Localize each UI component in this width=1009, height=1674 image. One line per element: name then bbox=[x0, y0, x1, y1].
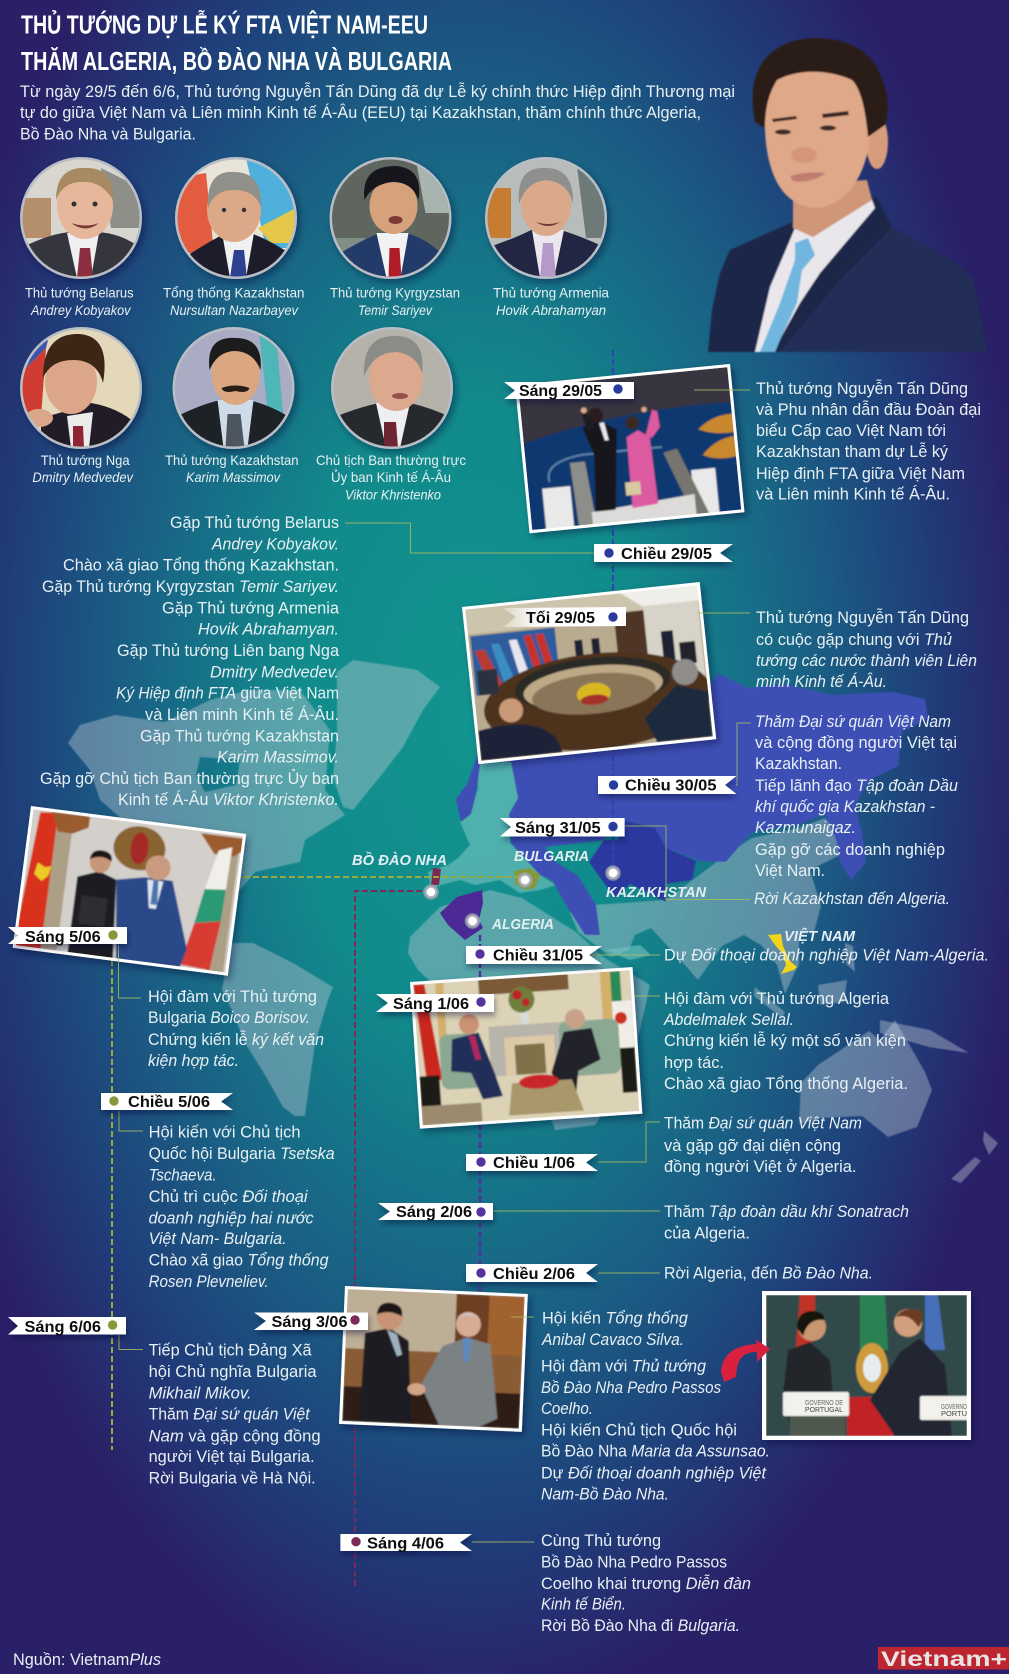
text: Chiều 29/05: Chào xã giao Tổng thống Kazakhstan. bbox=[63, 556, 339, 575]
connector lines bbox=[118, 390, 751, 1542]
leader captions: Dmitry Medvedev bbox=[32, 469, 134, 485]
event: Sáng 31/05 bbox=[500, 818, 950, 908]
ribbon: Sáng 5/06: Sáng 5/06 bbox=[25, 929, 101, 946]
ribbon: Chiều 1/06 bbox=[466, 1154, 598, 1172]
timeline lines bbox=[112, 350, 613, 1589]
text: Sáng 6/06: Rời Bulgaria về Hà Nội. bbox=[149, 1469, 316, 1488]
text: Sáng 3/06: Hội đàm với Thủ tướng bbox=[541, 1356, 707, 1376]
ribbon: Sáng 2/06 bbox=[378, 1203, 493, 1221]
country: vietnam bbox=[768, 934, 797, 974]
text: Chiều 5/06: doanh nghiệp hai nước bbox=[149, 1209, 314, 1228]
text: Chiều 1/06: Thăm Đại sứ quán Việt Nam bbox=[664, 1114, 862, 1132]
text: Sáng 5/06: Bulgaria Boico Borisov. bbox=[148, 1008, 310, 1027]
intro paragraph bbox=[20, 82, 735, 143]
text: Chiều 29/05: Gặp Thủ tướng Kazakhstan bbox=[140, 726, 339, 745]
source: Nguồn: VietnamPlus bbox=[13, 1650, 161, 1669]
text: Chiều 2/06: Rời Algeria, đến Bồ Đào Nha. bbox=[664, 1264, 873, 1283]
map labels: BULGARIA bbox=[514, 848, 589, 865]
text: Sáng 31/05: Rời Kazakhstan đến Algeria. bbox=[754, 889, 950, 908]
text: Sáng 5/06: Chứng kiến lễ ký kết văn bbox=[148, 1030, 324, 1049]
ribbon: Chiều 30/05: Chiều 30/05 bbox=[625, 778, 717, 795]
ribbon: Sáng 5/06 bbox=[8, 927, 127, 946]
ribbon: Chiều 5/06 bbox=[101, 1093, 233, 1111]
ribbon: Chiều 31/05 bbox=[466, 946, 602, 964]
text: Chiều 5/06: Việt Nam- Bulgaria. bbox=[149, 1229, 287, 1248]
leader captions: Thủ tướng Nga bbox=[41, 452, 130, 468]
text: Chiều 30/05: Tiếp lãnh đạo Tập đoàn Dầu bbox=[755, 776, 959, 795]
ribbon: Sáng 3/06 bbox=[254, 1312, 368, 1331]
text: Sáng 3/06: Nam-Bồ Đào Nha. bbox=[541, 1485, 669, 1504]
text: Sáng 3/06 bbox=[541, 1309, 770, 1504]
ribbon: Chiều 5/06: Chiều 5/06 bbox=[128, 1094, 210, 1111]
portrait: Nguyen Tan Dung bbox=[708, 38, 987, 352]
text: Chiều 30/05: khí quốc gia Kazakhstan - bbox=[755, 797, 935, 816]
text: Chiều 5/06: Quốc hội Bulgaria Tsetska bbox=[149, 1144, 335, 1163]
arrow: red curved bbox=[721, 1339, 770, 1382]
text: Sáng 2/06 bbox=[664, 1202, 909, 1243]
ribbon: Sáng 4/06: Sáng 4/06 bbox=[367, 1536, 444, 1553]
text: Sáng 3/06: Anibal Cavaco Silva. bbox=[541, 1330, 684, 1349]
map labels bbox=[352, 848, 855, 945]
portrait: Dmitry Medvedev bbox=[20, 327, 142, 449]
text: Sáng 29/05: và Liên minh Kinh tế Á-Âu. bbox=[756, 484, 950, 504]
country: portugal bbox=[431, 868, 441, 885]
text: Chiều 29/05: Andrey Kobyakov. bbox=[211, 534, 339, 553]
ribbon: Sáng 29/05: Sáng 29/05 bbox=[519, 383, 602, 400]
text: Chiều 29/05: Karim Massimov. bbox=[217, 748, 339, 767]
text: Chiều 5/06: Tschaeva. bbox=[149, 1166, 217, 1185]
text: Chiều 30/05: Gặp gỡ các doanh nghiệp bbox=[755, 840, 945, 859]
country: bulgaria bbox=[514, 868, 540, 890]
event: Tối 29/05 bbox=[503, 607, 977, 691]
portrait: Temir Sariyev bbox=[330, 157, 452, 279]
photo: departure 29/05 bbox=[515, 364, 745, 534]
text: Chiều 30/05 bbox=[755, 712, 959, 880]
leader captions: Nursultan Nazarbayev bbox=[170, 302, 299, 318]
ribbon: Chiều 31/05: Chiều 31/05 bbox=[493, 948, 583, 964]
country: algeria bbox=[440, 890, 483, 940]
text: Sáng 29/05: và Phu nhân dẫn đầu Đoàn đại bbox=[756, 400, 981, 419]
leader captions: Thủ tướng Kazakhstan bbox=[165, 452, 298, 468]
ribbon: Chiều 1/06: Chiều 1/06 bbox=[493, 1155, 575, 1172]
text: Sáng 1/06: Chào xã giao Tổng thống Algeria. bbox=[664, 1074, 908, 1093]
ribbon: Sáng 1/06 bbox=[376, 994, 494, 1013]
text: Sáng 4/06 bbox=[541, 1531, 751, 1635]
leader captions: Chủ tịch Ban thường trực bbox=[316, 452, 466, 468]
text: Sáng 1/06: Chứng kiến lễ ký một số văn kiện bbox=[664, 1031, 906, 1050]
text: Sáng 1/06: Hội đàm với Thủ tướng Algeria bbox=[664, 989, 890, 1008]
ribbon: Sáng 1/06: Sáng 1/06 bbox=[393, 996, 469, 1013]
leaders: portraits row 1 bbox=[20, 157, 607, 279]
event: Chiều 31/05 bbox=[466, 946, 989, 965]
leader captions: Ủy ban Kinh tế Á-Âu bbox=[331, 468, 451, 485]
text: Sáng 4/06: Cùng Thủ tướng bbox=[541, 1531, 661, 1550]
text: Chiều 29/05: Kinh tế Á-Âu Viktor Khristenko. bbox=[118, 790, 339, 809]
text: Sáng 6/06: Thăm Đại sứ quán Việt bbox=[149, 1405, 311, 1424]
map pins bbox=[425, 867, 619, 927]
leader captions bbox=[25, 284, 609, 502]
text: Sáng 6/06: người Việt tại Bulgaria. bbox=[149, 1447, 315, 1466]
text: Sáng 3/06: Hội kiến Chủ tịch Quốc hội bbox=[541, 1420, 737, 1440]
map labels: KAZAKHSTAN bbox=[606, 884, 707, 901]
text: Chiều 30/05: Thăm Đại sứ quán Việt Nam bbox=[755, 712, 951, 731]
text: Chiều 1/06: và gặp gỡ đại diện cộng bbox=[664, 1136, 841, 1155]
text: Chiều 30/05: Kazmunaigaz. bbox=[755, 818, 856, 837]
text: Chiều 29/05: Hovik Abrahamyan. bbox=[198, 620, 339, 639]
logo: Vietnam+: Vietnam+ bbox=[881, 1648, 1007, 1671]
text: Sáng 4/06: Bồ Đào Nha Pedro Passos bbox=[541, 1552, 727, 1572]
text: Tối 29/05: minh Kinh tế Á-Âu. bbox=[756, 672, 887, 691]
ribbon: Sáng 31/05 bbox=[500, 818, 625, 837]
leader captions: Andrey Kobyakov bbox=[30, 302, 131, 318]
text: Sáng 29/05: Thủ tướng Nguyễn Tấn Dũng bbox=[756, 379, 968, 398]
event: Sáng 3/06 bbox=[254, 1309, 770, 1504]
text: Sáng 6/06: hội Chủ nghĩa Bulgaria bbox=[149, 1362, 317, 1381]
text: Sáng 4/06: Coelho khai trương Diễn đàn bbox=[541, 1574, 751, 1593]
text: Chiều 29/05: Ký Hiệp định FTA giữa Việt Nam bbox=[116, 684, 339, 703]
text: Tối 29/05: Thủ tướng Nguyễn Tấn Dũng bbox=[756, 608, 969, 627]
leader captions: Karim Massimov bbox=[186, 469, 281, 485]
text: Chiều 1/06 bbox=[664, 1114, 862, 1176]
ribbon: Chiều 30/05 bbox=[598, 776, 736, 795]
event: Chiều 2/06 bbox=[466, 1264, 873, 1283]
russia bbox=[478, 673, 928, 935]
text: Chiều 29/05: Gặp Thủ tướng Liên bang Nga bbox=[117, 641, 340, 660]
text: Sáng 4/06: Rời Bồ Đào Nha đi Bulgaria. bbox=[541, 1616, 740, 1635]
title: THĂM ALGERIA, BỒ ĐÀO NHA VÀ BULGARIA bbox=[21, 46, 452, 76]
logo: Vietnam+ bbox=[878, 1647, 1009, 1671]
text: Chiều 29/05: Gặp Thủ tướng Belarus bbox=[170, 513, 339, 532]
event: Sáng 29/05 bbox=[504, 379, 981, 504]
text: Sáng 4/06: Kinh tế Biển. bbox=[541, 1595, 626, 1614]
text: Sáng 29/05: Kazakhstan tham dự Lễ ký bbox=[756, 442, 948, 461]
photo: round table 29/05 bbox=[462, 582, 716, 764]
ribbon: Sáng 29/05 bbox=[504, 382, 634, 400]
portrait: Viktor Khristenko bbox=[331, 327, 453, 449]
text: Sáng 29/05: biểu Cấp cao Việt Nam tới bbox=[756, 421, 946, 440]
text: Sáng 6/06: Tiếp Chủ tịch Đảng Xã bbox=[149, 1340, 312, 1360]
map labels: ALGERIA bbox=[491, 916, 554, 933]
text: Sáng 3/06: Dự Đối thoại doanh nghiệp Việt bbox=[541, 1464, 767, 1482]
portrait: Nursultan Nazarbayev bbox=[175, 157, 297, 279]
leader captions: Thủ tướng Armenia bbox=[493, 284, 609, 300]
event: Sáng 4/06 bbox=[340, 1531, 751, 1635]
text: Chiều 29/05 bbox=[40, 513, 340, 809]
event: Sáng 6/06 bbox=[8, 1317, 321, 1488]
event: Chiều 5/06 bbox=[101, 1093, 335, 1291]
photo: Algeria meeting bbox=[410, 967, 642, 1129]
text: Chiều 29/05: Dmitry Medvedev. bbox=[210, 662, 339, 681]
text: Chiều 5/06: Rosen Plevneliev. bbox=[149, 1272, 269, 1291]
text: Chiều 31/05: Dự Đối thoại doanh nghiệp Việt Nam-Algeria. bbox=[664, 946, 989, 965]
text: Chiều 5/06: Chào xã giao Tổng thống bbox=[149, 1251, 329, 1270]
leader captions: Temir Sariyev bbox=[358, 302, 433, 318]
text: Sáng 3/06: Bồ Đào Nha Pedro Passos bbox=[541, 1378, 721, 1397]
photo: Portugal press conference bbox=[762, 1291, 971, 1440]
leader captions: Thủ tướng Belarus bbox=[25, 284, 134, 300]
event: Sáng 2/06 bbox=[378, 1202, 909, 1243]
kazakhstan bbox=[589, 821, 696, 902]
ribbon: Tối 29/05: Tối 29/05 bbox=[526, 610, 595, 627]
event: Sáng 1/06 bbox=[376, 989, 908, 1093]
text: Sáng 3/06: Hội kiến Tổng thống bbox=[542, 1309, 689, 1328]
leaders: portraits row 2 bbox=[20, 327, 453, 449]
ribbon: Chiều 29/05: Chiều 29/05 bbox=[621, 546, 712, 563]
text: Chiều 30/05: Kazakhstan. bbox=[755, 754, 842, 773]
text: Chiều 30/05: và cộng đồng người Việt tại bbox=[755, 733, 957, 752]
event: Chiều 1/06 bbox=[466, 1114, 862, 1176]
photo: Portugal press conference: GOVERNO DE bbox=[805, 1400, 843, 1407]
portrait: Karim Massimov bbox=[172, 327, 294, 449]
text: Sáng 1/06: Abdelmalek Sellal. bbox=[663, 1010, 794, 1029]
photo: Portugal press conference: PORTUGAL bbox=[805, 1405, 843, 1414]
map labels: BỒ ĐÀO NHA bbox=[352, 851, 447, 869]
photo: Portugal press conference: PORTU bbox=[941, 1409, 967, 1418]
text: Sáng 6/06: Nam và gặp cộng đồng bbox=[149, 1426, 321, 1446]
photo: Portugal press conference: GOVERNO bbox=[941, 1404, 967, 1411]
text: Tối 29/05: tướng các nước thành viên Liên bbox=[756, 651, 977, 670]
ribbon: Sáng 6/06: Sáng 6/06 bbox=[24, 1319, 101, 1336]
ribbon: Chiều 2/06 bbox=[466, 1264, 598, 1283]
leader captions: Viktor Khristenko bbox=[345, 486, 441, 502]
leader captions: Hovik Abrahamyan bbox=[496, 302, 606, 318]
text: Sáng 3/06: Coelho. bbox=[541, 1399, 593, 1418]
world map bbox=[68, 660, 998, 1183]
text: Chiều 29/05: Gặp Thủ tướng Kyrgyzstan Temir Sariyev. bbox=[42, 577, 339, 596]
text: Sáng 2/06: Thăm Tập đoàn dầu khí Sonatrach bbox=[664, 1202, 909, 1221]
text: Chiều 29/05: Gặp Thủ tướng Armenia bbox=[162, 598, 340, 617]
ribbon: Tối 29/05 bbox=[503, 607, 626, 627]
text: Sáng 29/05: Hiệp định FTA giữa Việt Nam bbox=[756, 464, 965, 483]
intro paragraph: Bồ Đào Nha và Bulgaria. bbox=[20, 124, 196, 143]
portrait: Andrey Kobyakov bbox=[20, 157, 142, 279]
title: THỦ TƯỚNG DỰ LỄ KÝ FTA VIỆT NAM-EEU bbox=[21, 8, 428, 40]
text: Sáng 5/06 bbox=[148, 987, 324, 1070]
text: Tối 29/05: có cuộc gặp chung với Thủ bbox=[756, 630, 953, 649]
text: Sáng 5/06: kiện hợp tác. bbox=[148, 1051, 239, 1070]
text: Chiều 5/06: Hội kiến với Chủ tịch bbox=[149, 1123, 301, 1142]
event: Sáng 5/06 bbox=[8, 927, 324, 1070]
text: Chiều 1/06: đồng người Việt ở Algeria. bbox=[664, 1157, 856, 1176]
text: Sáng 2/06: của Algeria. bbox=[664, 1224, 750, 1243]
text: Chiều 29/05: và Liên minh Kinh tế Á-Âu. bbox=[145, 705, 339, 724]
ribbon: Sáng 4/06 bbox=[340, 1534, 472, 1553]
event: Chiều 29/05 bbox=[40, 513, 733, 809]
event: Chiều 30/05 bbox=[598, 712, 959, 880]
ribbon: Sáng 31/05: Sáng 31/05 bbox=[515, 820, 601, 837]
title bbox=[21, 8, 452, 76]
intro paragraph: Từ ngày 29/5 đến 6/6, Thủ tướng Nguyễn Tấn Dũng đã dự Lễ ký chính thức Hiệp định Thương mại bbox=[20, 82, 735, 101]
text: Sáng 1/06 bbox=[663, 989, 908, 1093]
text: Chiều 5/06: Chủ trì cuộc Đối thoại bbox=[149, 1187, 309, 1206]
text: Chiều 5/06 bbox=[149, 1123, 335, 1291]
text: Sáng 6/06: Mikhail Mikov. bbox=[149, 1384, 252, 1402]
text: Sáng 6/06 bbox=[149, 1340, 321, 1488]
intro paragraph: tự do giữa Việt Nam và Liên minh Kinh tế Á-Âu (EEU) tại Kazakhstan, thăm chính thức Algeria, bbox=[20, 103, 701, 122]
photo: Bulgaria meeting bbox=[13, 806, 246, 976]
portrait: Hovik Abrahamyan bbox=[485, 157, 607, 279]
photo: meeting with president Silva bbox=[339, 1286, 528, 1432]
ribbon: Sáng 2/06: Sáng 2/06 bbox=[396, 1204, 472, 1221]
ribbon: Chiều 2/06: Chiều 2/06 bbox=[493, 1266, 575, 1283]
text: Sáng 5/06: Hội đàm với Thủ tướng bbox=[148, 987, 317, 1006]
scandinavia bbox=[456, 754, 480, 822]
text: Chiều 29/05: Gặp gỡ Chủ tịch Ban thường trực Ủy ban bbox=[40, 769, 339, 788]
ribbon: Sáng 6/06 bbox=[8, 1317, 126, 1336]
text: Sáng 1/06: hợp tác. bbox=[664, 1053, 724, 1072]
leader captions: Tổng thống Kazakhstan bbox=[163, 284, 304, 300]
map labels: VIỆT NAM bbox=[784, 927, 855, 945]
ribbon: Sáng 3/06: Sáng 3/06 bbox=[272, 1314, 348, 1331]
text: Chiều 30/05: Việt Nam. bbox=[755, 861, 825, 880]
text: Sáng 3/06: Bồ Đào Nha Maria da Assunsao. bbox=[541, 1442, 770, 1461]
ribbon: Chiều 29/05 bbox=[594, 544, 733, 563]
text: Tối 29/05 bbox=[756, 608, 977, 691]
leader captions: Thủ tướng Kyrgyzstan bbox=[330, 284, 460, 300]
text: Sáng 29/05 bbox=[756, 379, 981, 504]
